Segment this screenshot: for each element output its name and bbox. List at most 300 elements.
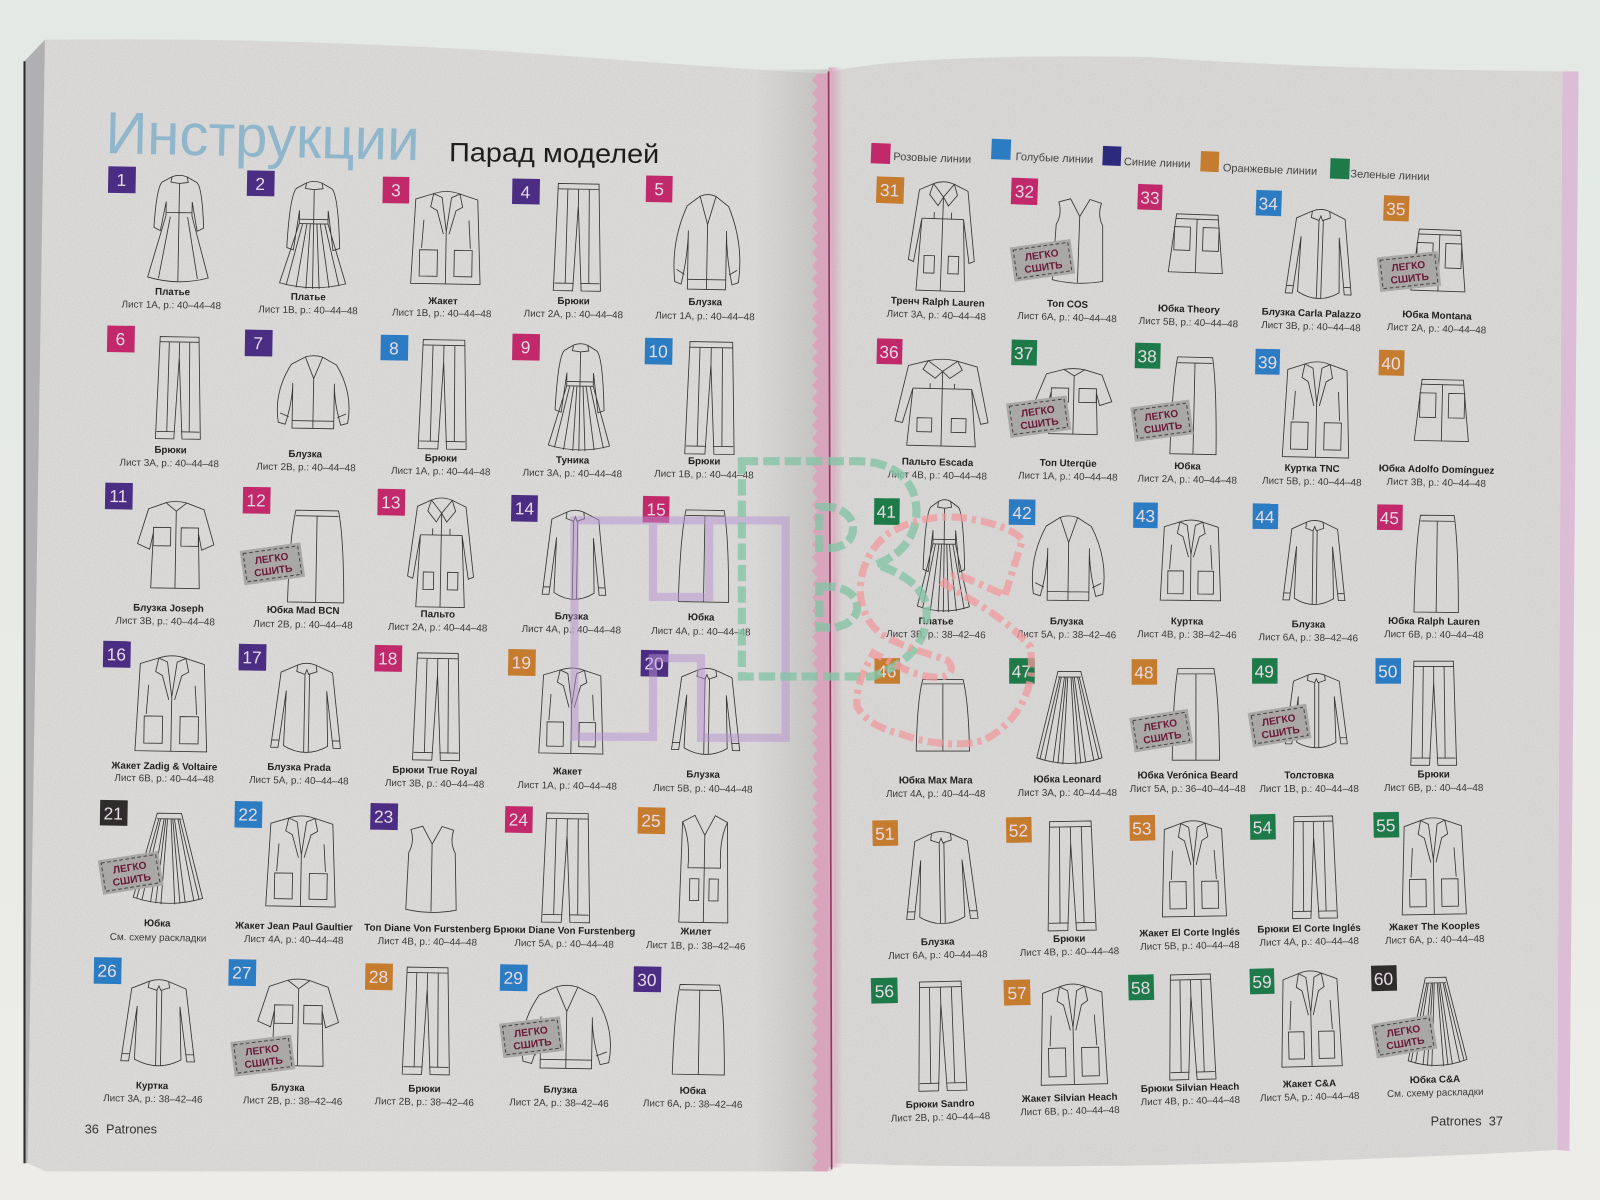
icon: blouse xyxy=(1032,515,1105,601)
badge 15 xyxy=(643,496,670,523)
item 22: jacket xyxy=(232,801,355,947)
item 52: trousers xyxy=(1006,815,1120,959)
icon: blouse xyxy=(671,668,741,755)
caption 12: Лист 2В, р.: 40–44–48 xyxy=(253,619,353,632)
icon: blouse xyxy=(1285,208,1354,300)
caption 14: Лист 4А, р.: 40–44–48 xyxy=(522,624,622,637)
stamp: easy to sew: СШИТЬ xyxy=(254,563,293,580)
badge 47 xyxy=(1009,658,1035,684)
caption 49: Толстовка xyxy=(1284,771,1335,782)
caption 30: Лист 6А, р.: 38–42–46 xyxy=(643,1098,743,1111)
icon: top xyxy=(1035,368,1113,435)
caption 31: Лист 3А, р.: 40–44–48 xyxy=(886,309,987,323)
badge 40 xyxy=(1379,350,1405,376)
icon: skirt xyxy=(1406,977,1467,1067)
icon: blouse xyxy=(257,978,339,1067)
caption 45: Юбка Ralph Lauren xyxy=(1388,616,1480,628)
item 48: skirt xyxy=(1129,659,1246,795)
stamp: easy to sew: ЛЕГКО xyxy=(245,1044,280,1059)
item 26: jacket xyxy=(92,957,206,1106)
caption 41 xyxy=(886,616,986,641)
caption 58 xyxy=(1140,1082,1241,1108)
item 14: blouse xyxy=(509,495,624,637)
caption 16: Лист 6В, р.: 40–44–48 xyxy=(114,773,214,786)
caption 46 xyxy=(886,776,986,800)
item 54: trousers xyxy=(1250,812,1362,949)
badge 30: 30 xyxy=(637,970,657,990)
caption 19 xyxy=(517,766,618,793)
badge 46 xyxy=(874,658,900,684)
caption 12: Юбка Mad BCN xyxy=(267,605,340,617)
caption 27: Лист 2В, р.: 38–42–46 xyxy=(243,1095,343,1108)
stamp: easy to sew: СШИТЬ xyxy=(112,872,152,889)
caption 50: Брюки xyxy=(1418,770,1450,781)
caption 16 xyxy=(110,760,218,786)
stamp: easy to sew: СШИТЬ xyxy=(1261,725,1301,742)
right page xyxy=(832,56,1562,1166)
caption 41: Лист 3В, р.: 38–42–46 xyxy=(886,629,986,641)
caption 24: Лист 5А, р.: 40–44–48 xyxy=(514,938,614,951)
icon: coat xyxy=(407,497,475,608)
item 60: skirt xyxy=(1370,963,1484,1100)
item 1: dress xyxy=(106,166,224,312)
item 53: jacket xyxy=(1129,813,1241,953)
caption 23: Лист 4В, р.: 40–44–48 xyxy=(378,936,478,949)
icon: skirt xyxy=(672,984,726,1075)
item 19: jacket xyxy=(506,649,620,793)
caption 3 xyxy=(392,295,492,320)
caption 30 xyxy=(643,1085,743,1111)
stamp: easy to sew xyxy=(1006,395,1071,438)
caption 3: Жакет xyxy=(427,296,458,307)
caption 35: Юбка Montana xyxy=(1402,309,1472,323)
caption 32: Лист 6А, р.: 40–44–48 xyxy=(1017,311,1117,325)
icon: jacket xyxy=(411,191,482,285)
caption 5: Лист 1А, р.: 40–44–48 xyxy=(655,311,755,323)
stamp: easy to sew: ЛЕГКО xyxy=(1391,260,1426,274)
item 59: jacket xyxy=(1249,966,1360,1104)
item 25: vest xyxy=(635,807,748,953)
caption 45: Лист 6В, р.: 40–44–48 xyxy=(1384,629,1484,641)
badge 20 xyxy=(641,650,669,677)
caption 41: Платье xyxy=(919,616,954,628)
caption 6 xyxy=(119,444,220,470)
item 23: top xyxy=(364,803,493,949)
icon: skirt xyxy=(1170,357,1218,455)
caption 52: Брюки xyxy=(1053,934,1086,945)
caption 11 xyxy=(115,602,216,628)
item 5: blouse xyxy=(644,176,758,323)
item 44: blouse xyxy=(1251,503,1360,644)
book page edge block xyxy=(24,40,45,1163)
badge 57 xyxy=(1003,979,1031,1006)
badge 60: 60 xyxy=(1374,969,1393,989)
stamp: easy to sew: СШИТЬ xyxy=(1390,272,1429,287)
watermark: pink dash-dot letter S xyxy=(857,517,1032,744)
icon: skirt xyxy=(133,813,204,905)
badge 11 xyxy=(105,483,133,510)
item 29: blouse xyxy=(498,964,612,1110)
badge 23: 23 xyxy=(374,807,393,827)
caption 18: Лист 3В, р.: 40–44–48 xyxy=(385,778,485,791)
caption 14: Блузка xyxy=(555,611,589,623)
legend: light blue: Голубые линии xyxy=(1015,151,1093,166)
caption 31: Тренч Ralph Lauren xyxy=(891,295,985,310)
badge 9: 9 xyxy=(521,337,531,357)
icon: blouse xyxy=(1283,520,1346,605)
stamp: easy to sew xyxy=(1377,251,1441,292)
icon: dress xyxy=(148,175,210,282)
item 46: skirt xyxy=(874,658,986,800)
badge 36 xyxy=(876,338,903,364)
item 27: blouse xyxy=(226,959,345,1108)
icon: trousers xyxy=(402,967,451,1075)
caption 44: Лист 6А, р.: 38–42–46 xyxy=(1259,632,1359,644)
badge 32: 32 xyxy=(1014,181,1034,202)
caption 19: Лист 1А, р.: 40–44–48 xyxy=(517,780,618,793)
stamp: easy to sew xyxy=(230,1035,295,1077)
caption 16: Жакет Zadig & Voltaire xyxy=(110,760,218,773)
caption 57: Лист 6В, р.: 40–44–48 xyxy=(1020,1105,1120,1118)
caption 1: Платье xyxy=(155,287,191,298)
icon: jacket xyxy=(1282,361,1351,458)
item 47: skirt xyxy=(1009,658,1118,799)
badge 6 xyxy=(107,325,135,352)
caption 20: Блузка xyxy=(686,769,721,781)
item 8: trousers xyxy=(378,335,493,478)
caption 31 xyxy=(886,295,987,323)
badge 2: 2 xyxy=(255,174,265,194)
item 39: jacket xyxy=(1253,349,1365,489)
caption 17 xyxy=(249,762,349,788)
stamp: easy to sew: ЛЕГКО xyxy=(1386,1024,1421,1040)
caption 45 xyxy=(1384,616,1484,641)
caption 56 xyxy=(890,1098,991,1125)
caption 33 xyxy=(1139,303,1239,330)
caption 55 xyxy=(1385,921,1485,947)
badge 7: 7 xyxy=(253,333,263,353)
badge 13 xyxy=(377,489,405,516)
caption 42: Блузка xyxy=(1050,616,1084,628)
legend: green: Зеленые линии xyxy=(1350,168,1430,183)
badge 40: 40 xyxy=(1381,353,1401,374)
icon: skirt xyxy=(1414,515,1460,613)
icon: dress xyxy=(279,181,347,289)
caption 21: См. схему раскладки xyxy=(110,932,206,945)
caption 55: Лист 6А, р.: 40–44–48 xyxy=(1385,934,1485,947)
icon: jacket xyxy=(1160,520,1222,601)
caption 4: Лист 2А, р.: 40–44–48 xyxy=(524,309,624,321)
watermark: purple outline letters xyxy=(574,520,786,738)
item 18: trousers xyxy=(372,645,487,791)
caption 37: Топ Uterqüe xyxy=(1040,458,1097,470)
caption 40: Лист 3В, р.: 40–44–48 xyxy=(1386,477,1487,490)
icon: jacket xyxy=(266,815,337,907)
badge 56: 56 xyxy=(874,981,894,1001)
caption 10: Брюки xyxy=(688,456,720,468)
stamp: easy to sew: СШИТЬ xyxy=(1143,420,1183,436)
caption 38: Лист 2А, р.: 40–44–48 xyxy=(1137,474,1238,487)
caption 17: Лист 5А, р.: 40–44–48 xyxy=(249,775,349,788)
badge 33 xyxy=(1137,184,1163,210)
badge 4 xyxy=(512,179,540,205)
caption 44 xyxy=(1259,619,1359,644)
icon: blouse xyxy=(542,510,607,600)
badge 53: 53 xyxy=(1132,818,1152,839)
item 10: trousers xyxy=(643,338,757,481)
caption 3: Лист 1В, р.: 40–44–48 xyxy=(392,308,492,320)
caption 21: Юбка xyxy=(144,918,171,930)
caption 22 xyxy=(234,921,353,947)
badge 11: 11 xyxy=(109,486,128,506)
caption 29 xyxy=(509,1084,610,1110)
item 37: top xyxy=(1004,339,1121,484)
badge 50: 50 xyxy=(1378,662,1397,682)
badge 24: 24 xyxy=(509,810,529,830)
stamp: easy to sew: ЛЕГКО xyxy=(254,552,289,567)
item 20: blouse xyxy=(638,650,755,796)
badge 28 xyxy=(365,963,393,990)
caption 18 xyxy=(385,765,485,791)
item 21: skirt xyxy=(96,800,209,945)
item 3: jacket xyxy=(380,177,494,320)
stamp: easy to sew: ЛЕГКО xyxy=(1020,404,1056,420)
badge 27 xyxy=(228,959,256,986)
badge 22: 22 xyxy=(238,804,258,825)
item 33: skirt xyxy=(1133,184,1243,330)
caption 51: Блузка xyxy=(921,937,955,948)
caption 5 xyxy=(655,296,756,323)
caption 40 xyxy=(1378,463,1495,490)
caption 37 xyxy=(1018,457,1118,484)
legend: dark blue: Синие линии xyxy=(1124,156,1191,171)
badge 36: 36 xyxy=(879,342,899,362)
badge 32 xyxy=(1011,178,1038,205)
icon: skirt xyxy=(1037,671,1102,764)
caption 22: Жакет Jean Paul Gaultier xyxy=(234,921,353,934)
caption 54: Лист 4А, р.: 40–44–48 xyxy=(1259,936,1360,949)
caption 40: Юбка Adolfo Domínguez xyxy=(1379,463,1495,477)
badge 18: 18 xyxy=(378,648,398,669)
stamp: easy to sew: СШИТЬ xyxy=(513,1037,552,1053)
icon: blouse xyxy=(521,985,612,1069)
item 24: trousers xyxy=(493,806,637,951)
item 2: dress xyxy=(245,170,361,317)
item 45: skirt xyxy=(1376,504,1486,641)
badge 31: 31 xyxy=(880,180,900,201)
icon: blouse xyxy=(674,194,741,290)
badge 16 xyxy=(103,641,131,668)
caption 46: Лист 4А, р.: 40–44–48 xyxy=(886,789,986,800)
badge 15: 15 xyxy=(646,499,666,520)
badge 29: 29 xyxy=(503,968,523,988)
caption 25 xyxy=(646,926,746,953)
item 11: blouse xyxy=(103,483,218,628)
caption 51: Лист 6А, р.: 40–44–48 xyxy=(888,949,988,962)
item 42: blouse xyxy=(1007,499,1118,641)
item 32: top xyxy=(1007,178,1122,325)
badge 34: 34 xyxy=(1258,193,1279,214)
badge 52 xyxy=(1006,817,1032,843)
caption 28: Лист 2В, р.: 38–42–46 xyxy=(374,1096,475,1109)
stamp: easy to sew: СШИТЬ xyxy=(1024,260,1063,276)
item 58: trousers xyxy=(1128,972,1241,1109)
caption 15 xyxy=(651,611,751,639)
caption 1 xyxy=(121,286,222,312)
caption 2: Лист 1В, р.: 40–44–48 xyxy=(258,304,358,317)
icon: coat xyxy=(894,358,989,447)
badge 6: 6 xyxy=(115,329,125,349)
badge 13: 13 xyxy=(381,492,401,513)
stamp: easy to sew: СШИТЬ xyxy=(244,1055,284,1071)
caption 38: Юбка xyxy=(1174,461,1201,473)
caption 46: Юбка Max Mara xyxy=(899,776,973,787)
icon: jacket xyxy=(1401,817,1466,915)
stamp: easy to sew: ЛЕГКО xyxy=(1261,713,1297,729)
caption 59: Лист 5А, р.: 40–44–48 xyxy=(1260,1091,1360,1104)
caption 57: Жакет Silvian Heach xyxy=(1021,1092,1118,1105)
legend: orange xyxy=(1200,151,1318,178)
legend: line colours xyxy=(871,139,1430,183)
caption 57 xyxy=(1020,1092,1120,1118)
icon: skirt xyxy=(916,680,969,751)
caption 50: Лист 6В, р.: 40–44–48 xyxy=(1384,783,1484,794)
item 12: skirt xyxy=(238,487,356,632)
caption 20 xyxy=(653,769,753,796)
badge 39 xyxy=(1255,349,1280,375)
icon: jacket xyxy=(121,979,196,1066)
caption 33: Лист 5В, р.: 40–44–48 xyxy=(1139,316,1239,330)
legend: pink xyxy=(871,143,972,167)
badge 17 xyxy=(239,644,267,671)
legend: pink: Розовые линии xyxy=(893,151,971,166)
badge 57: 57 xyxy=(1007,983,1027,1003)
caption 48: Лист 5А, р.: 36–40–44–48 xyxy=(1130,784,1246,795)
caption 56: Лист 2В, р.: 40–44–48 xyxy=(891,1111,991,1125)
caption 37: Лист 1А, р.: 40–44–48 xyxy=(1018,471,1118,484)
badge 12 xyxy=(243,487,271,514)
icon: tunic xyxy=(548,343,611,452)
icon: jacket xyxy=(1039,983,1108,1085)
icon: dress xyxy=(917,499,971,612)
caption 34: Лист 3В, р.: 40–44–48 xyxy=(1261,320,1361,334)
icon: skirt xyxy=(288,510,345,603)
caption 53: Лист 5В, р.: 40–44–48 xyxy=(1140,940,1240,953)
caption 48 xyxy=(1130,771,1246,795)
badge 24 xyxy=(505,806,533,833)
badge 58: 58 xyxy=(1131,978,1151,998)
badge 21: 21 xyxy=(103,803,123,824)
badge 22 xyxy=(234,801,262,828)
caption 6: Лист 3А, р.: 40–44–48 xyxy=(119,457,220,470)
item 57: jacket xyxy=(1003,977,1120,1119)
badge 28: 28 xyxy=(369,967,388,987)
badge 27: 27 xyxy=(232,963,252,983)
caption 39 xyxy=(1262,462,1362,489)
badge 35: 35 xyxy=(1386,199,1406,219)
badge 35 xyxy=(1383,195,1410,222)
legend: orange: Оранжевые линии xyxy=(1223,162,1317,178)
caption 13: Лист 2А, р.: 40–44–48 xyxy=(388,622,488,634)
badge 45: 45 xyxy=(1380,508,1399,528)
caption 24 xyxy=(493,924,635,951)
item 56: trousers xyxy=(871,975,991,1125)
item 49: sweatshirt xyxy=(1248,658,1359,795)
badge 46: 46 xyxy=(877,662,896,682)
caption 36: Лист 4В, р.: 40–44–48 xyxy=(887,469,988,483)
badge 29 xyxy=(500,964,528,991)
caption 22: Лист 4А, р.: 40–44–48 xyxy=(244,934,344,947)
badge 49: 49 xyxy=(1255,662,1274,682)
caption 2 xyxy=(258,291,359,317)
caption 52 xyxy=(1019,933,1120,959)
icon: skirt xyxy=(678,510,730,602)
item 28: trousers xyxy=(363,963,477,1109)
badge 42 xyxy=(1009,499,1036,525)
badge 9 xyxy=(512,334,540,361)
caption 7 xyxy=(256,448,357,474)
pink gutter on right page xyxy=(829,67,843,1167)
badge 16: 16 xyxy=(107,644,126,665)
item 36: coat xyxy=(874,338,991,483)
badge 52: 52 xyxy=(1009,820,1028,841)
item 50: trousers xyxy=(1376,658,1484,794)
item 43: jacket xyxy=(1132,502,1239,641)
badge 26 xyxy=(94,957,122,984)
caption 53 xyxy=(1138,927,1241,953)
stamp: easy to sew: ЛЕГКО xyxy=(1144,409,1179,424)
caption 52: Лист 4В, р.: 40–44–48 xyxy=(1020,946,1120,959)
badge 3: 3 xyxy=(391,180,401,200)
caption 26: Куртка xyxy=(136,1080,169,1092)
caption 9 xyxy=(523,454,623,480)
icon: jacket xyxy=(1161,820,1227,917)
caption 58: Брюки Silvian Heach xyxy=(1141,1082,1239,1095)
icon: trousers xyxy=(1046,821,1096,931)
caption 15: Лист 4А, р.: 40–44–48 xyxy=(651,626,751,639)
item 9: tunic xyxy=(510,334,625,480)
caption 9: Лист 3А, р.: 40–44–48 xyxy=(523,468,623,480)
item 30: skirt xyxy=(631,966,745,1111)
caption 47 xyxy=(1018,775,1118,799)
badge 51: 51 xyxy=(875,824,895,844)
caption 32 xyxy=(1017,297,1118,325)
badge 4: 4 xyxy=(520,182,531,202)
caption 25: Жилет xyxy=(679,926,712,938)
caption 10: Лист 1В, р.: 40–44–48 xyxy=(654,469,754,481)
caption 14 xyxy=(522,611,622,637)
caption 55: Жакет The Kooples xyxy=(1388,921,1481,933)
caption 9: Туника xyxy=(556,455,590,467)
caption 34 xyxy=(1261,307,1362,334)
icon: trousers xyxy=(412,653,461,761)
icon: jacket xyxy=(135,655,208,752)
badge 43: 43 xyxy=(1136,506,1155,526)
stamp: easy to sew: СШИТЬ xyxy=(1143,730,1182,747)
badge 3 xyxy=(382,177,409,204)
caption 56: Брюки Sandro xyxy=(906,1098,975,1111)
badge 30 xyxy=(633,966,661,992)
item 51: blouse xyxy=(872,819,988,962)
subtitle: Парад моделей xyxy=(449,137,659,169)
caption 28: Брюки xyxy=(408,1084,441,1095)
item 35: skirt xyxy=(1374,195,1491,337)
icon: trousers xyxy=(685,342,736,455)
caption 13: Пальто xyxy=(421,609,455,621)
caption 44: Блузка xyxy=(1292,619,1326,631)
caption 5: Блузка xyxy=(688,297,723,308)
badge 20: 20 xyxy=(644,653,664,674)
